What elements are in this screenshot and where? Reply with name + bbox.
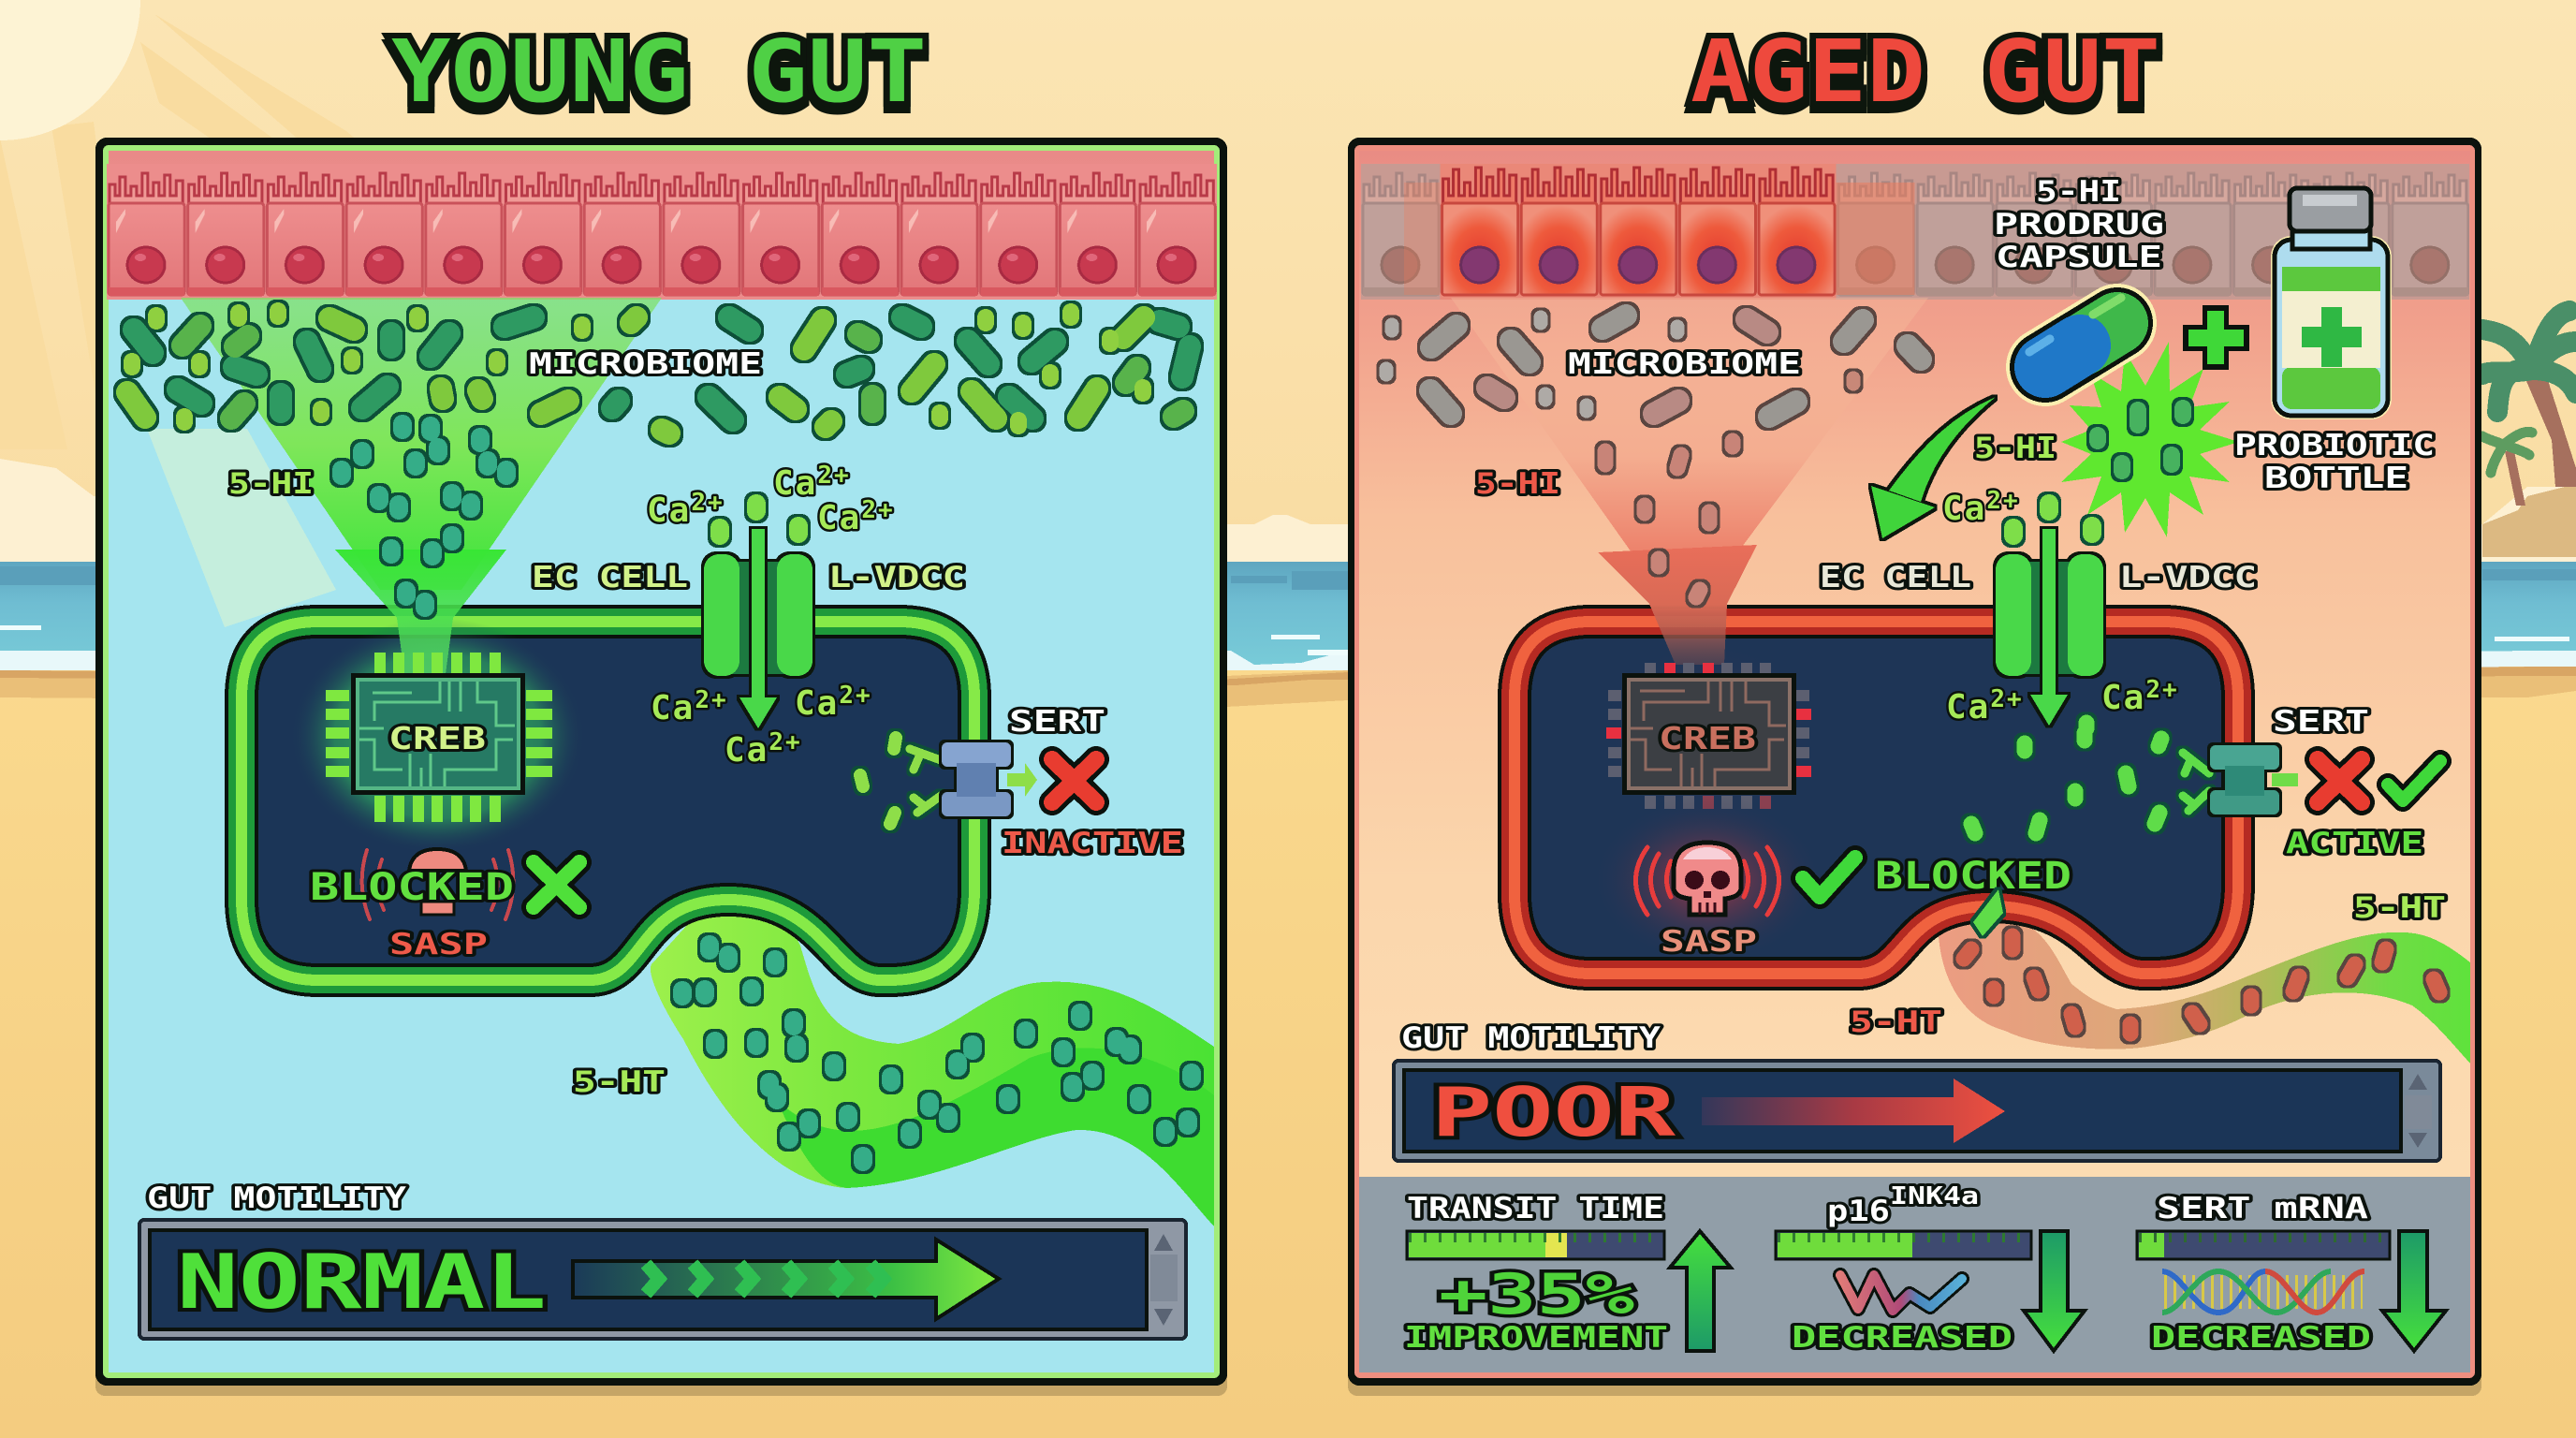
sun <box>0 0 140 140</box>
SERT transporter <box>942 742 1011 816</box>
label: SASP: SASP <box>1661 925 1757 959</box>
calcium labels: Ca <box>724 731 768 770</box>
p16 INK4a: p16 <box>1827 1195 1890 1228</box>
p16 INK4a: DECREASED <box>1792 1321 2012 1355</box>
5-HI granules <box>1605 441 1733 597</box>
calcium labels: Ca <box>651 689 695 727</box>
label: gut motility: GUT MOTILITY <box>147 1181 406 1215</box>
palm trees <box>2482 311 2576 506</box>
green X <box>534 862 579 907</box>
label: 5-HI prodrug capsule <box>1994 175 2164 274</box>
5-HI granules <box>342 424 506 608</box>
transit time <box>1404 1192 1731 1355</box>
probiotic bottle <box>2271 188 2392 419</box>
inner granules <box>1971 723 2209 833</box>
funnel: 5-HI <box>181 298 662 674</box>
calcium labels: 2+ <box>691 489 724 517</box>
transit time: TRANSIT TIME <box>1407 1192 1664 1225</box>
horizon clouds <box>0 459 2576 562</box>
calcium labels: 2+ <box>1986 487 2020 515</box>
calcium dots <box>720 504 798 536</box>
p16 INK4a: INK4a <box>1890 1182 1979 1211</box>
calcium labels: 2+ <box>839 682 872 710</box>
SASP skull muted <box>362 849 513 919</box>
panel: aged gut <box>1348 138 2481 1396</box>
panel frame <box>95 138 1227 1396</box>
calcium arrow <box>739 529 777 728</box>
calcium labels: Ca <box>1946 688 1990 726</box>
calcium labels: Ca <box>2101 679 2145 717</box>
SERT mRNA <box>2137 1192 2446 1355</box>
CREB chip, dormant <box>1591 637 1825 824</box>
inactive X <box>1052 759 1096 802</box>
calcium labels <box>1942 487 2179 726</box>
motility meter: normal: NORMAL <box>177 1239 547 1326</box>
label: EC cell: EC CELL <box>532 561 688 594</box>
L-VDCC channel <box>704 554 812 676</box>
label: probiotic bottle: PROBIOTIC <box>2234 429 2435 462</box>
label: EC cell: EC CELL <box>1820 561 1971 594</box>
label: microbiome: MICROBIOME <box>1568 347 1801 381</box>
label: probiotic bottle: BOTTLE <box>2264 462 2408 495</box>
panel: young gut <box>95 138 1227 1396</box>
label: 5-HT right: 5-HT <box>2353 891 2446 925</box>
bacteria rods <box>127 311 1190 433</box>
5-HT stream <box>1939 915 2470 1064</box>
label: blocked: BLOCKED <box>310 866 514 909</box>
label: 5-HI: 5-HI <box>228 467 314 501</box>
calcium labels <box>647 462 895 770</box>
L-VDCC channel <box>1996 554 2103 676</box>
CREB chip: CREB <box>388 720 486 756</box>
calcium labels: 2+ <box>1990 685 2024 713</box>
skull glow <box>1590 796 1824 964</box>
capsule <box>2029 298 2121 367</box>
label: 5-HI prodrug capsule: CAPSULE <box>1996 241 2162 274</box>
label: probiotic bottle <box>2234 429 2435 495</box>
calcium labels: 2+ <box>817 462 851 490</box>
label: 5-HT lower: 5-HT <box>1850 1005 1942 1039</box>
calcium labels: Ca <box>1942 490 1986 528</box>
CREB chip, dormant: CREB <box>1659 720 1756 756</box>
title: aged gut: AGED GUT <box>1690 22 2160 122</box>
sun rays <box>0 14 412 468</box>
calcium labels: 2+ <box>768 728 802 756</box>
label: 5-HI: 5-HI <box>1475 467 1560 501</box>
motility meter: poor <box>1394 1061 2440 1161</box>
green granule <box>1973 889 2003 936</box>
SERT output stub <box>2272 773 2298 786</box>
island <box>2482 484 2576 557</box>
motility meter: poor: POOR <box>1431 1073 1676 1152</box>
label: active: ACTIVE <box>2286 827 2423 860</box>
calcium dots <box>2013 504 2092 536</box>
SERT output arrow <box>1007 763 1037 797</box>
label: gut motility: GUT MOTILITY <box>1401 1021 1661 1055</box>
red X <box>2318 759 2362 802</box>
label: L-VDCC: L-VDCC <box>828 561 965 594</box>
calcium labels: 2+ <box>2145 676 2179 704</box>
transit time: IMPROVEMENT <box>1404 1321 1668 1355</box>
motility meter: normal <box>139 1220 1186 1339</box>
SERT mRNA: DECREASED <box>2151 1321 2371 1355</box>
panel frame <box>1348 138 2481 1396</box>
label: blocked: BLOCKED <box>1875 855 2071 898</box>
panel: results <box>1359 1177 2470 1372</box>
foam <box>0 651 2576 680</box>
plus sign <box>2183 305 2249 370</box>
label: 5-HT: 5-HT <box>573 1065 666 1099</box>
p16 INK4a <box>1776 1182 2085 1355</box>
SERT mRNA: SERT mRNA <box>2157 1192 2368 1225</box>
epithelial cell row <box>1361 164 2469 300</box>
CREB chip <box>326 653 552 822</box>
label: microbiome: MICROBIOME <box>529 347 762 381</box>
label: SERT: SERT <box>2273 705 2369 739</box>
calcium arrow <box>2030 529 2068 726</box>
curved arrow <box>1871 397 1996 538</box>
5-HT granules <box>1964 936 2439 1034</box>
sea <box>0 562 2576 665</box>
light ray <box>147 429 336 627</box>
green check <box>2388 761 2440 800</box>
epithelial cell row <box>107 164 1217 300</box>
label: 5-HI green: 5-HI <box>1974 432 2056 465</box>
SERT transporter <box>2210 745 2279 814</box>
calcium labels: 2+ <box>695 686 728 714</box>
calcium labels: Ca <box>773 464 817 503</box>
5-HT granules <box>682 945 1192 1162</box>
label: SERT: SERT <box>1009 705 1105 739</box>
label: L-VDCC: L-VDCC <box>2119 561 2257 594</box>
label: 5-HI prodrug capsule: PRODRUG <box>1994 208 2164 242</box>
probiotic burst <box>2061 342 2239 537</box>
EC cell body <box>242 622 974 980</box>
title: young gut: YOUNG GUT <box>391 22 927 122</box>
5-HT stream <box>651 909 1214 1226</box>
label: inactive: INACTIVE <box>1002 827 1183 860</box>
green check <box>1803 858 1855 897</box>
label: SASP: SASP <box>389 928 488 961</box>
calcium labels: Ca <box>795 684 839 723</box>
label: 5-HI prodrug capsule: 5-HI <box>2036 175 2121 209</box>
SASP skull <box>1636 843 1778 915</box>
bacteria rods <box>1386 315 1921 417</box>
funnel: 5-HI <box>1451 298 1928 665</box>
calcium labels: 2+ <box>861 496 895 524</box>
EC cell body <box>1515 622 2238 974</box>
calcium labels: Ca <box>647 492 691 530</box>
burst granules <box>2098 408 2183 471</box>
sand <box>0 670 2576 1438</box>
reuptake granules <box>860 738 941 824</box>
calcium labels: Ca <box>817 499 861 537</box>
transit time: +35% <box>1439 1262 1634 1328</box>
chip glow <box>290 618 585 854</box>
